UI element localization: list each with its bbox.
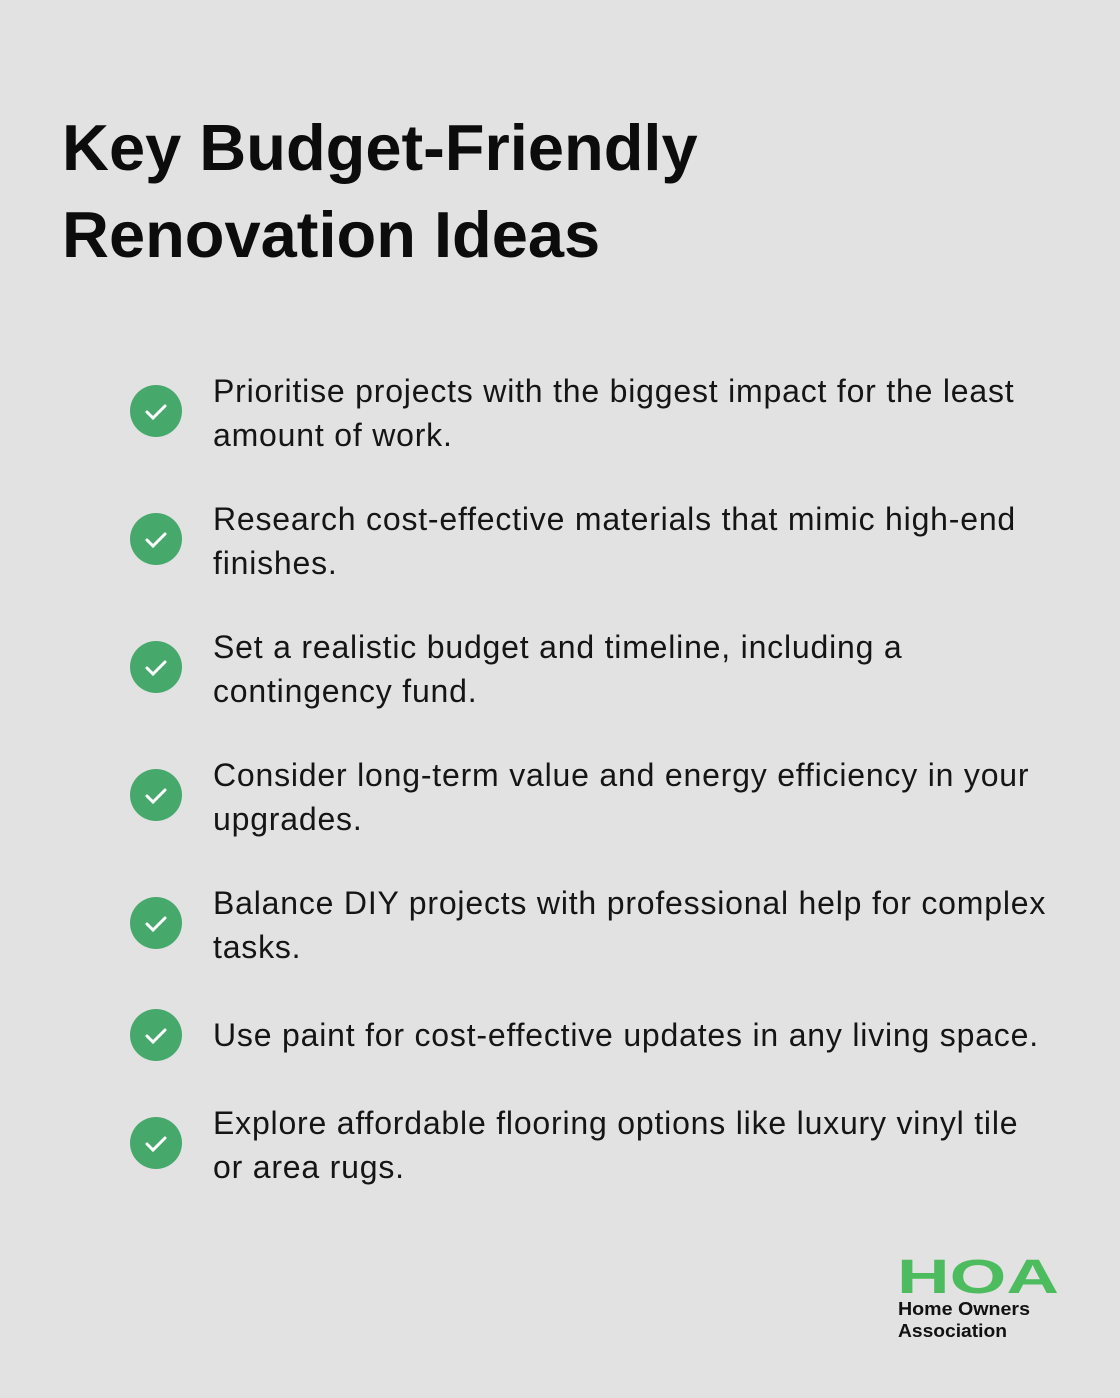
logo: Association bbox=[898, 1321, 1007, 1341]
text bbox=[213, 501, 1016, 581]
icon: check bbox=[130, 513, 182, 565]
text: Research cost-effective materials that mimic high-end bbox=[213, 501, 1016, 537]
item 4 bbox=[130, 757, 1029, 837]
text: or area rugs. bbox=[213, 1149, 405, 1185]
text: Balance DIY projects with professional help for complex bbox=[213, 885, 1046, 921]
icon: check bbox=[130, 1009, 182, 1061]
item 3 bbox=[130, 629, 902, 709]
icon: check bbox=[130, 1117, 182, 1169]
icon: check bbox=[130, 897, 182, 949]
item 6 bbox=[130, 1009, 1039, 1061]
text: Explore affordable flooring options like luxury vinyl tile bbox=[213, 1105, 1018, 1141]
text: Set a realistic budget and timeline, including a bbox=[213, 629, 902, 665]
text: Use paint for cost-effective updates in any living space. bbox=[213, 1017, 1039, 1053]
logo text: Home Owners bbox=[898, 1299, 1030, 1319]
logo bbox=[897, 1256, 1059, 1341]
text: tasks. bbox=[213, 929, 301, 965]
item 5 bbox=[130, 885, 1046, 965]
text: finishes. bbox=[213, 545, 338, 581]
text bbox=[213, 757, 1029, 837]
text bbox=[213, 373, 1014, 453]
icon: check bbox=[130, 641, 182, 693]
text: contingency fund. bbox=[213, 673, 477, 709]
item 7 bbox=[130, 1105, 1018, 1185]
icon: check bbox=[130, 385, 182, 437]
text: Consider long-term value and energy efficiency in your bbox=[213, 757, 1029, 793]
icon: check bbox=[130, 769, 182, 821]
title bbox=[62, 111, 698, 271]
text: amount of work. bbox=[213, 417, 453, 453]
text: upgrades. bbox=[213, 801, 363, 837]
text bbox=[213, 1105, 1018, 1185]
title: Renovation Ideas bbox=[62, 198, 600, 271]
text bbox=[213, 629, 902, 709]
text: Prioritise projects with the biggest impact for the least bbox=[213, 373, 1014, 409]
text bbox=[213, 885, 1046, 965]
title: Key Budget-Friendly bbox=[62, 111, 698, 184]
item 1 bbox=[130, 373, 1014, 453]
item 2 bbox=[130, 501, 1016, 581]
